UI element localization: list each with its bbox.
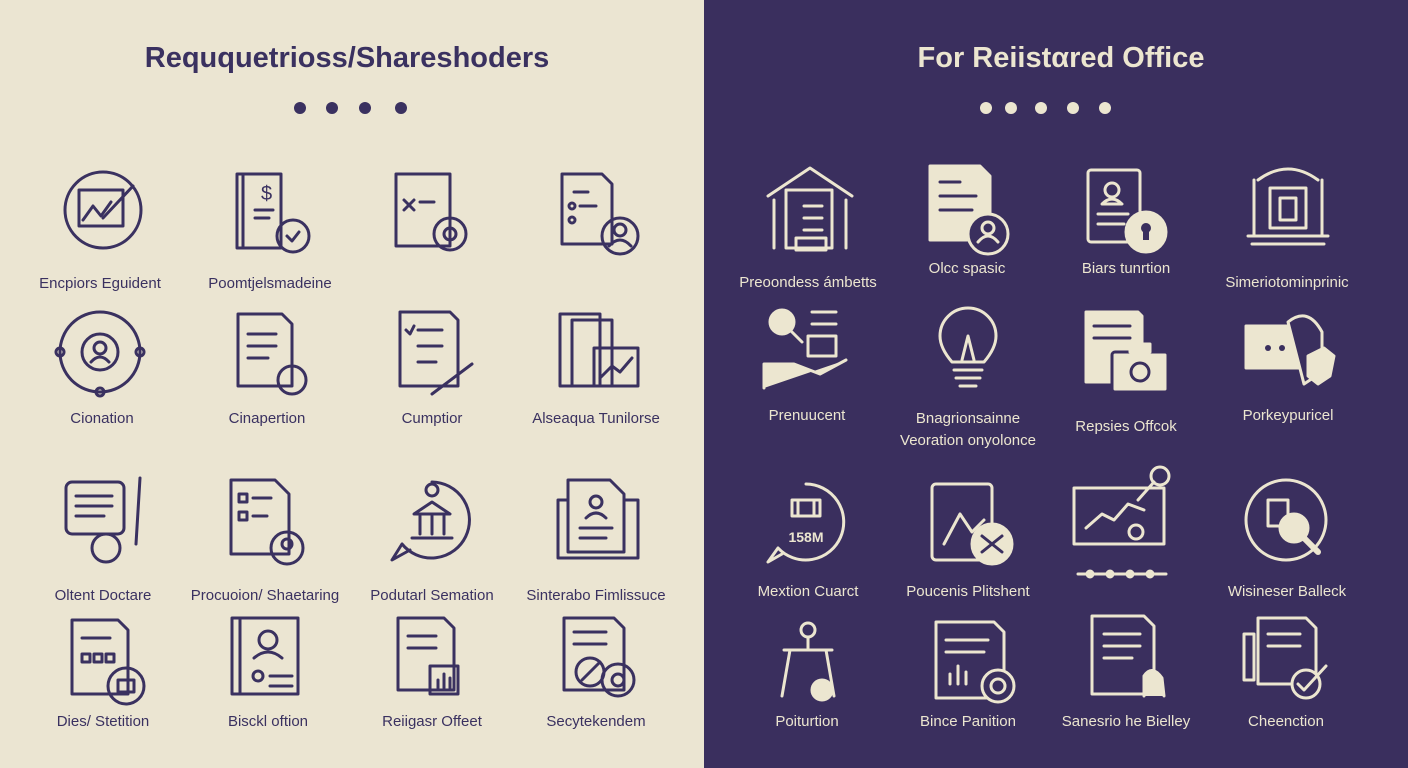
- labels: right: Poiturtion: [775, 713, 839, 730]
- icon: doc check: [1244, 618, 1326, 698]
- labels: left: [39, 275, 666, 730]
- icon: notebook dollar: [237, 174, 309, 252]
- labels: left: Sinterabo Fimlissuce: [526, 587, 666, 604]
- icon: doc person: [562, 174, 638, 254]
- labels: left: Oltent Doctare: [55, 587, 151, 604]
- labels: left: Cumptior: [402, 410, 462, 427]
- icon: easel: [782, 623, 834, 700]
- icon: speech clock: [768, 484, 844, 562]
- labels: left: Cionation: [70, 410, 134, 427]
- icon: doc briefcase: [1086, 312, 1168, 392]
- labels: right: Prenuucent: [769, 407, 846, 424]
- labels: left: Procuoion/ Shaetaring: [191, 587, 339, 604]
- labels: right: Poucenis Plitshent: [906, 583, 1031, 600]
- icon: screen chart: [1074, 467, 1169, 577]
- icon: id card lock: [1088, 170, 1166, 252]
- title: left: Reququetrioss/Shareshoders: [145, 42, 549, 74]
- icon: building: [1248, 169, 1328, 244]
- labels: right: Olcc spasic: [929, 260, 1006, 277]
- icon: doc person: [558, 480, 638, 558]
- icon: circle person: [56, 312, 144, 396]
- labels: right: Repsies Offcok: [1075, 418, 1177, 435]
- labels: right: Bince Panition: [920, 713, 1016, 730]
- icon: doc badge: [564, 618, 634, 696]
- labels: right: Cheenction: [1248, 713, 1324, 730]
- labels: right: Bnagrionsainne: [916, 410, 1020, 427]
- icon: notebook person: [232, 618, 298, 694]
- labels: right: Simeriotominprinic: [1225, 274, 1349, 291]
- icon: notebook dollar: $: [261, 183, 272, 205]
- icon: tablet tool: [932, 484, 1012, 564]
- labels: right: [739, 260, 1349, 730]
- title: right: For Reiistαred Office: [918, 42, 1204, 74]
- labels: right: Veoration onyolonce: [900, 432, 1036, 449]
- labels: right: Biars tunrtion: [1082, 260, 1170, 277]
- icon: checklist person: [231, 480, 303, 564]
- icon: monitor shield: [1246, 316, 1334, 384]
- icon: doc hand: [1092, 616, 1164, 696]
- labels: right: Mextion Cuarct: [758, 583, 859, 600]
- labels: right: Sanesrio he Bielley: [1062, 713, 1191, 730]
- icon: speech bubble building: [392, 482, 469, 560]
- icon: gear chart: [65, 172, 141, 248]
- icon: doc gear: [396, 174, 466, 250]
- labels: left: Reiigasr Offeet: [382, 713, 483, 730]
- labels: left: Secytekendem: [546, 713, 646, 730]
- labels: left: Dies/ Stetition: [57, 713, 149, 730]
- icon: doc grid bag: [72, 620, 144, 704]
- icon: speech clock: 158M: [788, 529, 824, 545]
- panel: left grid: [56, 172, 638, 704]
- icon: doc chart circle: [936, 622, 1014, 702]
- icon: checklist pencil: [400, 312, 472, 394]
- icon: filled doc person: [930, 166, 1008, 254]
- panel: right grid: [764, 166, 1334, 702]
- labels: right: Preoondess ámbetts: [739, 274, 877, 291]
- labels: left: Podutarl Semation: [370, 587, 494, 604]
- labels: left: Alseaqua Tunilorse: [532, 410, 660, 427]
- dots: right: [980, 102, 1111, 114]
- icon: doc chart: [398, 618, 458, 694]
- icon: hand magnifier: [764, 310, 846, 388]
- icon: circle search: [1246, 480, 1326, 560]
- icon: light bulb: [940, 308, 996, 386]
- labels: right: Wisineser Balleck: [1228, 583, 1347, 600]
- icon: house checklist: [768, 168, 852, 250]
- labels: left: Bisckl oftion: [228, 713, 308, 730]
- labels: left: Cinapertion: [229, 410, 305, 427]
- labels: left: Encpiors Eguident: [39, 275, 162, 292]
- dots: left: [294, 102, 407, 114]
- labels: left: Poomtjelsmadeine: [208, 275, 332, 292]
- icon: docs chart: [560, 314, 638, 386]
- labels: right: Porkeypuricel: [1243, 407, 1333, 424]
- icon: doc circle: [238, 314, 306, 394]
- icon: doc pen: [66, 478, 140, 562]
